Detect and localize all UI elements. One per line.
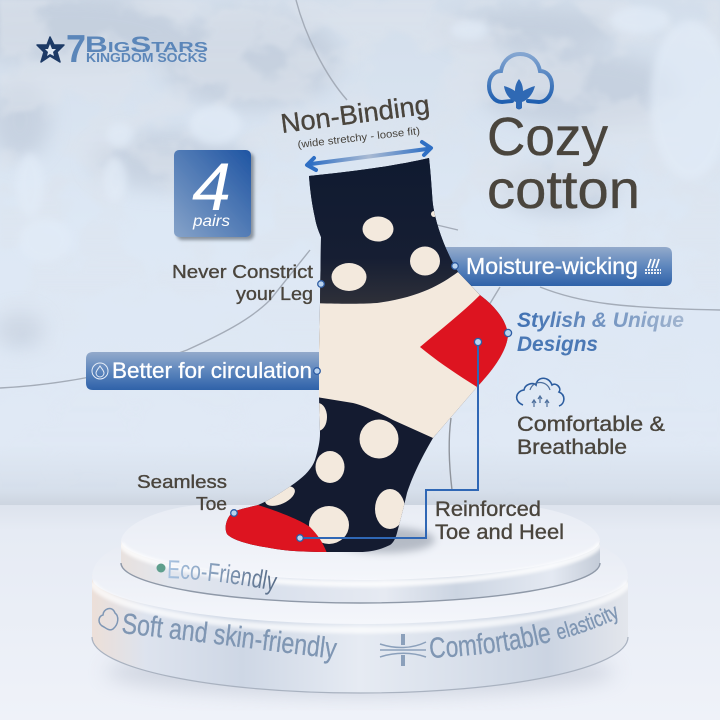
sock: upper band (309, 158, 458, 304)
badge: 4 pairs: pairs (192, 213, 230, 230)
callout: Seamless Toe: Toe (196, 494, 227, 514)
callout: Better for circulation pill (86, 352, 322, 390)
callout: Reinforced Toe and Heel: Reinforced (435, 498, 541, 521)
sock (220, 150, 520, 560)
callout: Reinforced Toe and Heel (435, 498, 564, 544)
logo text: BigStars (85, 32, 208, 57)
badge: 4 pairs: 4 (192, 149, 231, 225)
callout: Moisture-wicking (430, 247, 672, 286)
heading: Cozy cotton (487, 107, 640, 220)
icon: breathable cloud (517, 378, 564, 407)
callout: Never Constrict your Leg: Never Constrict (172, 261, 313, 282)
heading: Cozy cotton: cotton (487, 160, 640, 220)
podium: upper disc (120, 505, 601, 604)
heading: Non-Binding: Non-Binding (279, 90, 431, 139)
callout: Stylish and Unique Designs (517, 309, 684, 356)
callout: Comfortable and Breathable (517, 413, 665, 459)
floor shadow under podium (105, 648, 615, 696)
callout: Stylish and Unique Designs: Stylish & Unique (517, 309, 684, 332)
podium text: Soft and skin-friendly: Soft and skin-friendly (122, 614, 338, 664)
callout: Better for circulation label: Better for circulation (112, 358, 312, 383)
callout: Moisture-wicking: Moisture-wicking (466, 253, 638, 279)
callout: Comfortable and Breathable: Breathable (517, 436, 627, 459)
background wall with tree shadows (0, 0, 720, 506)
sock: red toe (226, 505, 326, 552)
callout leader line: reinforced toe and heel (300, 342, 478, 538)
icon: star (37, 37, 64, 62)
callout: Reinforced Toe and Heel: Toe and Heel (435, 521, 564, 544)
callout: Comfortable and Breathable: Comfortable & (517, 413, 665, 436)
callout: Never Constrict your Leg (172, 261, 313, 304)
sock: cream mid band (310, 272, 520, 438)
arrow: width double arrow (307, 142, 431, 170)
callout: Stylish and Unique Designs: Designs (517, 333, 598, 356)
badge: 4 pairs (174, 149, 251, 237)
icon: cotton boll (489, 54, 552, 110)
floor (0, 505, 720, 720)
heading: Cozy cotton: Cozy (487, 107, 608, 167)
podium text: Comfortable elasticity: Comfortable elasticity (430, 606, 618, 658)
callout: Seamless Toe: Seamless (137, 472, 227, 492)
callout marker dots (231, 263, 512, 541)
heading: Non-Binding: (wide stretchy - loose fit) (297, 125, 421, 151)
logo text: 7 (66, 28, 86, 71)
podium text: Comfortable elasticity (380, 606, 618, 666)
sock: polka dots (262, 211, 440, 544)
callout: Seamless Toe (137, 472, 227, 514)
callout: Never Constrict your Leg: your Leg (236, 283, 313, 304)
logo text (66, 28, 208, 71)
sock shadow (335, 527, 435, 553)
logo text: KINGDOM SOCKS (86, 51, 207, 65)
logo: 7BigStars Kingdom Socks (37, 28, 208, 71)
sock: red heel (420, 295, 510, 387)
podium text: Eco-Friendly: Eco-Friendly (168, 560, 278, 595)
podium: lower disc (91, 580, 629, 694)
icon: water drop in ring (92, 363, 108, 379)
icon: wicking lines (645, 259, 661, 273)
